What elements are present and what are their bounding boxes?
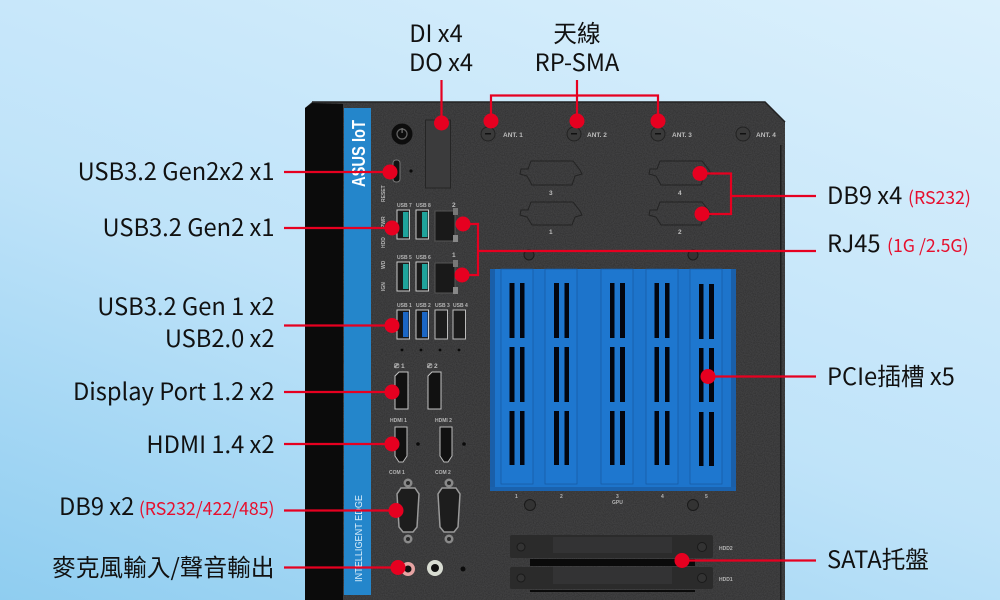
USB 7/8 ports: USB 7 <box>397 203 412 209</box>
label: antenna <box>535 15 620 78</box>
label: HDMI: HDMI 1.4 x2 <box>146 426 274 460</box>
audio jacks <box>401 560 466 576</box>
label: Display Port: Display Port 1.2 x2 <box>73 373 274 407</box>
label: USB3.2 Gen1 / USB2.0: USB2.0 x2 <box>165 320 274 354</box>
power button <box>392 124 412 144</box>
RJ45 ports: 2 <box>452 202 456 209</box>
USB 7/8 ports: USB 8 <box>416 203 431 209</box>
SATA trays: HDD1 <box>719 577 733 583</box>
PCIe panel <box>490 269 736 491</box>
PCIe slot numbers: GPU <box>612 500 623 506</box>
label: USB3.2 Gen2: USB3.2 Gen2 x1 <box>103 209 274 243</box>
antenna holes: ANT. 1 <box>503 132 523 139</box>
HDMI ports: HDMI 1 <box>390 418 407 424</box>
USB 1-4 ports: USB 4 <box>453 303 468 309</box>
USB 1-4 ports: USB 2 <box>416 303 431 309</box>
USB 7/8 ports <box>397 203 431 239</box>
PCIe slot numbers: 5 <box>705 494 708 500</box>
label: DI DO: DO x4 <box>409 44 473 78</box>
PCIe slot numbers: 4 <box>661 494 664 500</box>
PCIe slot covers <box>501 269 722 484</box>
DisplayPort ports: ⎚ 1 <box>393 363 405 370</box>
label: antenna: 天線 <box>553 15 601 49</box>
strip slogan: INTELLIGENT EDGE <box>354 495 365 582</box>
label: DB9 x2: DB9 x2 <box>59 488 134 522</box>
antenna holes: ANT. 2 <box>587 132 607 139</box>
label: RJ45 <box>827 225 969 259</box>
USB-C port <box>393 160 413 182</box>
blank DIO cover <box>426 120 450 188</box>
DB9 knockouts: 4 <box>678 190 682 197</box>
USB 1-4 ports <box>397 303 468 351</box>
label: USB3.2 Gen2x2: USB3.2 Gen2x2 x1 <box>78 153 274 187</box>
antenna holes: ANT. 3 <box>672 132 692 139</box>
callout dots <box>382 114 716 575</box>
COM DB9 ports <box>389 470 460 544</box>
PCIe slot numbers: 2 <box>560 494 563 500</box>
label: microphone and audio: 麥克風輸入/聲音輸出 <box>52 549 274 583</box>
label: DI DO: DI x4 <box>409 15 463 49</box>
side LED labels: IGN <box>381 282 387 291</box>
RJ45 ports <box>435 202 458 294</box>
side LED labels: PWR <box>381 216 387 228</box>
antenna holes <box>481 127 776 141</box>
label: SATA: SATA托盤 <box>827 541 929 575</box>
label: antenna: RP-SMA <box>535 44 620 78</box>
label: DB9 x4: DB9 x4 <box>827 177 902 211</box>
COM DB9 ports: COM 2 <box>435 470 451 476</box>
PCIe slot numbers: 3 <box>616 494 619 500</box>
device chassis <box>305 102 785 600</box>
blue brand strip <box>344 108 371 595</box>
ventilation slits <box>510 283 714 466</box>
PCIe slot numbers: 1 <box>515 494 518 500</box>
side LED labels: WD <box>381 260 387 269</box>
label: PCIe: PCIe插槽 x5 <box>827 358 955 392</box>
DB9 knockouts: 2 <box>678 229 682 236</box>
label: DB9 x2: (RS232/422/485) <box>139 495 274 521</box>
DB9 knockouts: 1 <box>549 229 553 236</box>
callout lines <box>284 80 816 568</box>
SATA trays <box>510 535 733 592</box>
USB 5/6 ports <box>397 255 431 291</box>
PCIe slot numbers <box>515 494 708 506</box>
SATA trays: HDD2 <box>719 546 733 552</box>
label: DB9 x4: (RS232) <box>908 184 971 210</box>
DB9 knockouts: 3 <box>549 190 553 197</box>
side LED labels: RESET <box>381 185 387 202</box>
DisplayPort ports: ⎚ 2 <box>426 363 438 370</box>
USB 5/6 ports: USB 5 <box>397 255 412 261</box>
RJ45 ports: 1 <box>452 252 456 259</box>
label: USB3.2 Gen1 / USB2.0 <box>97 288 274 354</box>
DB9 knockouts <box>520 161 711 236</box>
HDMI ports: HDMI 2 <box>435 418 452 424</box>
USB 1-4 ports: USB 3 <box>435 303 450 309</box>
side LED labels: HDD <box>381 237 387 248</box>
USB 1-4 ports: USB 1 <box>397 303 412 309</box>
label: USB3.2 Gen1 / USB2.0: USB3.2 Gen 1 x2 <box>97 288 274 322</box>
COM DB9 ports: COM 1 <box>389 470 405 476</box>
label: DB9 x2 <box>59 488 274 522</box>
label: RJ45: RJ45 <box>827 225 881 259</box>
antenna holes: ANT. 4 <box>756 132 776 139</box>
HDMI ports <box>390 418 466 462</box>
label: RJ45: (1G /2.5G) <box>887 232 969 258</box>
side LED labels <box>381 185 387 291</box>
screws <box>524 250 698 510</box>
label: DI DO <box>409 15 473 78</box>
label: DB9 x4 <box>827 177 971 211</box>
USB 5/6 ports: USB 6 <box>416 255 431 261</box>
brand logo: ASUS IoT <box>349 120 369 187</box>
DisplayPort ports <box>393 363 441 409</box>
